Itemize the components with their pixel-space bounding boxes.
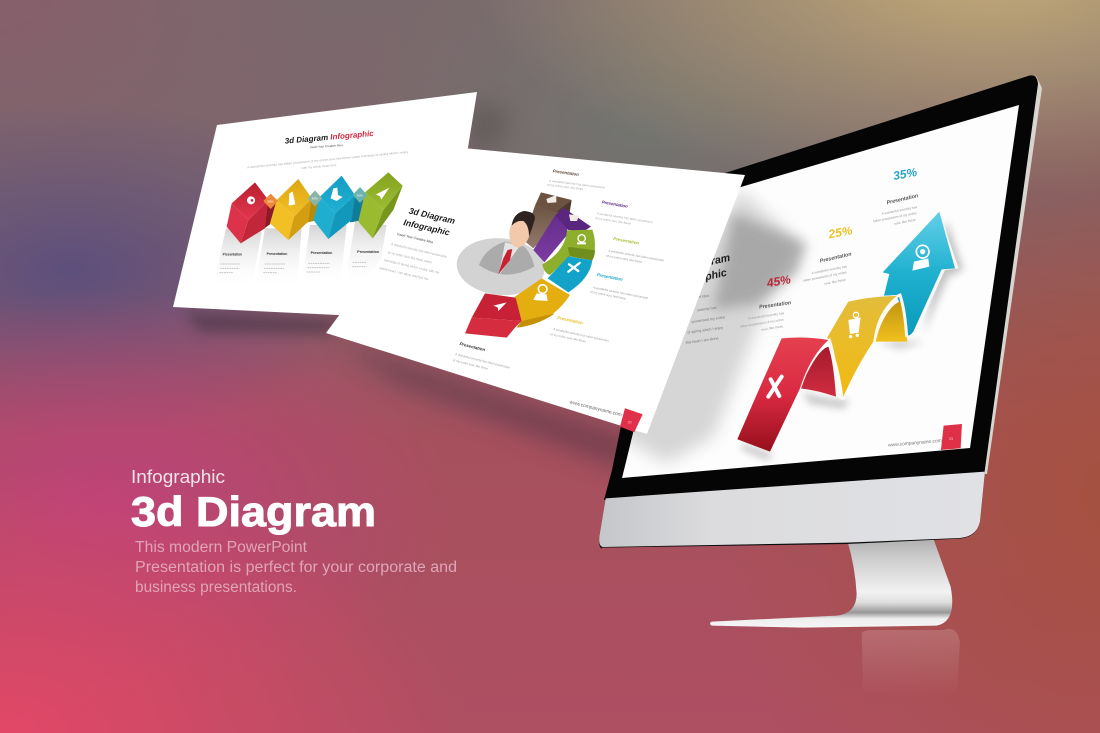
label: red: Presentation <box>459 341 486 352</box>
percentage tags: 30% <box>267 199 274 203</box>
monitor stand <box>710 538 952 628</box>
slide 2: radial 3d diagram <box>326 148 745 434</box>
label: purple: of my entire soul, like these <box>595 216 631 226</box>
percentage tags: 30% <box>312 197 318 201</box>
label: yellow: Presentation <box>557 315 584 325</box>
label: blue: A wonderful serenity has taken possession <box>592 285 649 300</box>
label: 35%: 35% <box>892 165 918 183</box>
segment: green <box>542 230 595 275</box>
label: red: of my entire soul, like these <box>452 358 489 371</box>
page number tag: 23 <box>949 437 953 441</box>
hidden slide title: Diagram <box>687 252 732 272</box>
page number tag <box>620 408 643 432</box>
footer url: www.companyname.com <box>569 400 622 418</box>
description text: Presentation is perfect for your corporate and <box>135 559 457 576</box>
slide 1: 3d cubes <box>173 92 477 320</box>
label: yellow: of my entire soul, like these <box>550 332 587 344</box>
hidden slide body: Insert Idea <box>692 294 710 300</box>
cube captions: Presentation <box>311 251 332 255</box>
slide 2 body copy: whole heart, I am alone and feel the <box>379 266 429 281</box>
label: brown: Presentation <box>553 168 580 177</box>
gray base disc <box>454 235 547 299</box>
page number tag: 20 <box>628 420 632 424</box>
label: yellow <box>550 315 609 344</box>
ribbon white edge yellow <box>874 295 907 342</box>
label: 25% <box>803 223 854 286</box>
slide 1 title: 3d Diagram Infographic <box>284 129 375 146</box>
label: blue: of my entire soul, like these <box>590 290 626 301</box>
slide 2 body copy: A wonderful serenity has taken possession <box>391 242 448 259</box>
slide 2 body copy: mornings of spring which I enjoy with my <box>383 258 440 275</box>
silver rim <box>983 76 1042 474</box>
cube: green <box>358 172 403 238</box>
blue arrow <box>883 212 955 335</box>
slide 2 title <box>403 206 456 238</box>
label: 35%: Presentation <box>886 193 920 206</box>
slide 2 title: Infographic <box>403 217 451 238</box>
label: purple: Presentation <box>601 199 629 209</box>
label: red <box>452 341 511 371</box>
label: green: of my entire soul, like these <box>606 254 642 264</box>
title: 3d Diagram: 3d Diagram <box>131 488 376 535</box>
label: blue <box>590 272 649 301</box>
ribbon arrow chart <box>737 212 963 460</box>
cube: blue <box>313 176 355 239</box>
ribbon labels <box>740 165 962 450</box>
caption body lines <box>219 262 367 273</box>
cube captions: Presentation <box>223 253 242 257</box>
label: 35%: soul, like these <box>894 218 916 226</box>
description text: business presentations. <box>135 579 297 596</box>
inner fold red <box>800 347 836 397</box>
label: 45%: taken possession of my entire <box>740 318 784 329</box>
slide 1 subtitle: Insert Your Creative Idea <box>310 143 343 149</box>
slide 2 subtitle: Insert Your Creative Idea <box>397 232 434 244</box>
segment: purple <box>533 208 591 262</box>
hidden slide title <box>705 255 730 282</box>
cube captions: Presentation <box>267 252 287 256</box>
label: brown: A wonderful serenity has taken possession <box>549 179 606 190</box>
label: 25%: 25% <box>826 223 854 241</box>
icon: tools <box>768 377 782 397</box>
label: 45%: A wonderful serenity has <box>748 311 785 321</box>
slide 2 title: 3d Diagram <box>408 206 456 226</box>
cube: red <box>227 182 268 243</box>
label: 45%: Presentation <box>759 300 792 311</box>
cube reflections <box>213 222 387 288</box>
page number tag <box>941 424 962 450</box>
label: 45%: soul, like these <box>761 324 784 332</box>
ribbon ground shadow <box>740 220 963 460</box>
label: 25%: A wonderful serenity has <box>811 264 848 275</box>
cube captions <box>223 250 379 257</box>
label: 25%: taken possession of my entire <box>803 270 847 283</box>
icon: target person <box>912 245 929 271</box>
man figure <box>479 211 535 275</box>
segment: brown <box>523 192 572 248</box>
red band <box>737 337 828 452</box>
slide 1 body copy: with my whole heart here <box>301 163 337 170</box>
inner fold yellow <box>875 301 907 342</box>
percentage tags <box>263 187 367 209</box>
slide 1 body copy: A wonderful serenity has taken possession of my entire soul, like these sweet mornings of spring which I enjoy <box>247 150 409 169</box>
label: yellow: A wonderful serenity has taken possession <box>553 327 609 343</box>
darker shadow streak <box>713 213 807 310</box>
hidden slide body: this heart I am alone <box>685 336 719 345</box>
black bezel <box>604 75 1038 500</box>
slide 1 text and reflections <box>213 129 409 288</box>
slide 2 body copy <box>379 242 448 281</box>
label: brown <box>547 168 606 191</box>
label: 45%: 45% <box>765 272 792 290</box>
label: red: A wonderful serenity has taken possession <box>455 352 511 370</box>
monitor <box>599 75 1042 697</box>
slide 2 body copy: of my entire soul, like these sweet <box>387 250 432 264</box>
hidden slide body: possessed my entire <box>691 315 725 324</box>
icon: shopping cart <box>848 312 861 338</box>
label: 25%: soul, like these <box>824 278 846 286</box>
screen <box>622 105 1019 478</box>
cube: yellow <box>270 179 312 240</box>
label: purple <box>595 199 653 226</box>
hidden slide body <box>685 294 725 345</box>
label: blue: Presentation <box>596 272 623 282</box>
segment: yellow <box>515 278 570 328</box>
description text <box>135 539 457 596</box>
description text: This modern PowerPoint <box>135 539 308 556</box>
label: green <box>606 236 665 264</box>
footer url: www.companyname.com <box>888 439 942 449</box>
label: 35% <box>873 165 920 226</box>
radial diagram <box>454 192 595 338</box>
label: 45% <box>740 272 792 332</box>
arrow white edge <box>883 212 959 338</box>
monitor chin <box>599 472 985 549</box>
hidden slide title: Infographic <box>669 267 728 291</box>
cast shadow of floating slide <box>620 190 800 463</box>
label: 35%: A wonderful serenity has <box>881 205 918 216</box>
label: green: A wonderful serenity has taken possession <box>608 249 665 262</box>
slide 2 text <box>379 168 665 432</box>
hidden slide body: serenity has <box>697 306 717 312</box>
label: brown: of my entire soul, like these <box>547 183 584 191</box>
percentage tags: 30% <box>357 193 363 197</box>
segment: blue <box>548 256 592 292</box>
screen contents <box>620 190 807 463</box>
connector strips between cubes <box>263 193 365 229</box>
hidden slide body: of spring which I enjoy <box>687 326 724 335</box>
label: 35%: taken possession of my entire <box>873 211 917 223</box>
label: purple: A wonderful serenity has taken possession <box>596 211 653 224</box>
ribbon white edge red <box>799 340 845 398</box>
label: 25%: Presentation <box>819 251 853 265</box>
cube captions: Presentation <box>357 250 379 254</box>
segment: red <box>465 293 522 338</box>
slide shadows on background <box>185 100 640 470</box>
kicker: Infographic: Infographic <box>131 467 225 487</box>
heading block <box>131 467 457 596</box>
cubes group <box>227 172 403 243</box>
yellow band <box>827 296 897 397</box>
label: green: Presentation <box>613 236 640 246</box>
monitor stand reflection <box>862 629 960 697</box>
